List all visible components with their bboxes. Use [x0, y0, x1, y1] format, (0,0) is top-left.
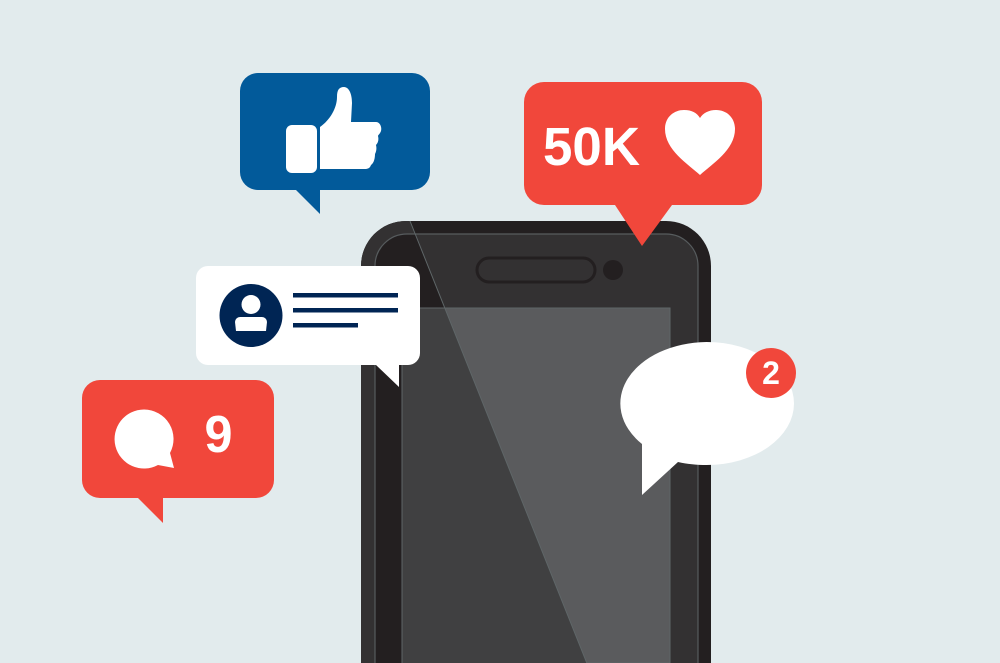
- smartphone: [340, 200, 711, 663]
- comment count body: [82, 380, 274, 523]
- text lines: [293, 293, 398, 328]
- phone camera: [603, 260, 623, 280]
- comment card bubble: [196, 266, 420, 387]
- likes count bubble: [524, 82, 762, 246]
- screen glare edge: [410, 221, 587, 663]
- notification badge: [746, 348, 796, 398]
- icon: thumbs up: [286, 87, 381, 173]
- hearts bubble body: [524, 82, 762, 246]
- comment count bubble: [82, 380, 274, 523]
- like bubble body: [240, 73, 430, 214]
- icon: speech bubble: [115, 410, 174, 468]
- phone screen: [402, 308, 670, 663]
- phone inner bezel: [375, 234, 698, 663]
- icon: heart: [665, 110, 735, 175]
- phone speaker: [477, 258, 595, 282]
- message notification bubble: [620, 342, 796, 495]
- comment card body: [196, 266, 420, 387]
- count: 50K: 50K: [543, 117, 640, 177]
- count: 9: 9: [204, 406, 232, 464]
- message bubble body: [620, 342, 794, 495]
- icon: user avatar: [220, 284, 282, 347]
- like bubble: [240, 73, 430, 214]
- count: 2: 2: [762, 355, 780, 391]
- bezel edge line: [375, 234, 698, 663]
- infographic: smartphone with social notifications: [82, 73, 796, 663]
- phone body outer ring: [361, 221, 711, 663]
